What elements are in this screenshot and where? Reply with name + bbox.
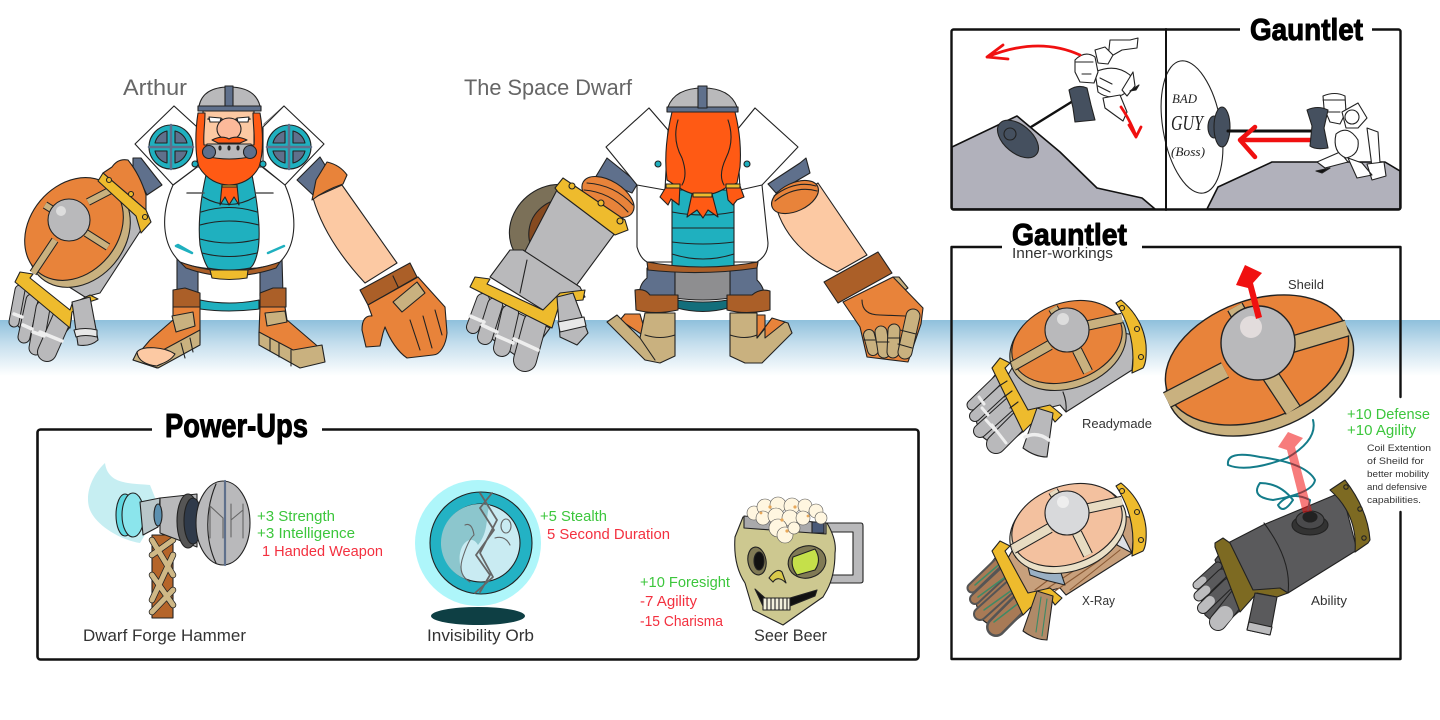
gauntlet on Arthur's right arm [4,158,152,355]
label: X-Ray: X-Ray [1082,593,1115,608]
label: Invisibility Orb: Invisibility Orb [427,626,534,645]
stats: orb: 5 Second Duration [547,526,670,543]
icon: X-Ray gauntlet [972,469,1146,640]
heading: The Space Dwarf: The Space Dwarf [464,75,633,100]
knot emblem left [149,125,193,169]
coil [1228,420,1315,510]
knot emblem right [267,125,311,169]
note: coil extension: capabilities. [1367,495,1421,506]
icon: Invisibility Orb [415,480,541,625]
stats: seer beer [640,574,731,630]
label: Ability: Ability [1311,593,1348,608]
stats: seer beer: -7 Agility [640,593,697,610]
icon: Seer Beer skull mug [735,497,863,625]
stats: hammer [257,508,383,560]
arrow: coil extension [1278,432,1312,513]
note: coil extension: of Sheild for [1367,456,1424,467]
note: coil extension [1367,443,1431,506]
character: Arthur front view [4,86,447,368]
heading: Gauntlet comic: Gauntlet [1250,12,1363,47]
stats: orb: +5 Stealth [540,508,607,525]
stats: hammer: +3 Strength [257,508,335,525]
subheading: Inner-workings: Inner-workings [1012,245,1113,262]
note: coil extension: and defensive [1367,482,1427,493]
comic frame 2: bad guy: BAD [1172,91,1198,106]
comic frame 2: bad guy: GUY [1171,111,1205,135]
stats: hammer: +3 Intelligence [257,525,355,542]
heading: Power-Ups: Power-Ups [165,407,308,444]
icon: Ability gauntlet [1197,480,1370,635]
stats: shield bonus: +10 Defense [1347,406,1430,423]
bare arm [313,185,397,283]
beard from behind [666,112,740,195]
label: Readymade: Readymade [1082,416,1152,431]
bare arm back [777,183,867,272]
comic frame 2: bad guy: (Boss) [1171,144,1205,159]
panel: Gauntlet inner-workings [952,217,1431,659]
label: Dwarf Forge Hammer: Dwarf Forge Hammer [83,626,246,645]
panel: Power-Ups [38,407,918,660]
stats: shield bonus [1347,406,1430,439]
comic frame 1: jump [952,38,1155,209]
comic frame 2: bad guy [1152,56,1400,209]
icon: Readymade gauntlet [972,286,1146,457]
stats: seer beer: -15 Charisma [640,613,724,630]
icon: Dwarf Forge Hammer [88,463,250,618]
label: Seer Beer: Seer Beer [754,626,827,645]
stats: orb [540,508,670,543]
character: Arthur back view [470,86,923,363]
note: coil extension: Coil Extention [1367,443,1431,454]
gauntlet back [470,167,641,362]
stats: hammer: 1 Handed Weapon [262,543,383,560]
heading: Arthur: Arthur [123,75,187,100]
note: coil extension: better mobility [1367,469,1429,480]
stats: seer beer: +10 Foresight [640,574,731,591]
label: Sheild: Sheild [1288,277,1324,292]
panel: Gauntlet comic [952,12,1400,210]
heading: Gauntlet inner-workings: Gauntlet [1012,217,1127,252]
stats: shield bonus: +10 Agility [1347,422,1417,439]
arrow: shield launch [1236,265,1262,319]
floor band [0,320,1440,376]
icon: Sheild [1147,271,1372,460]
